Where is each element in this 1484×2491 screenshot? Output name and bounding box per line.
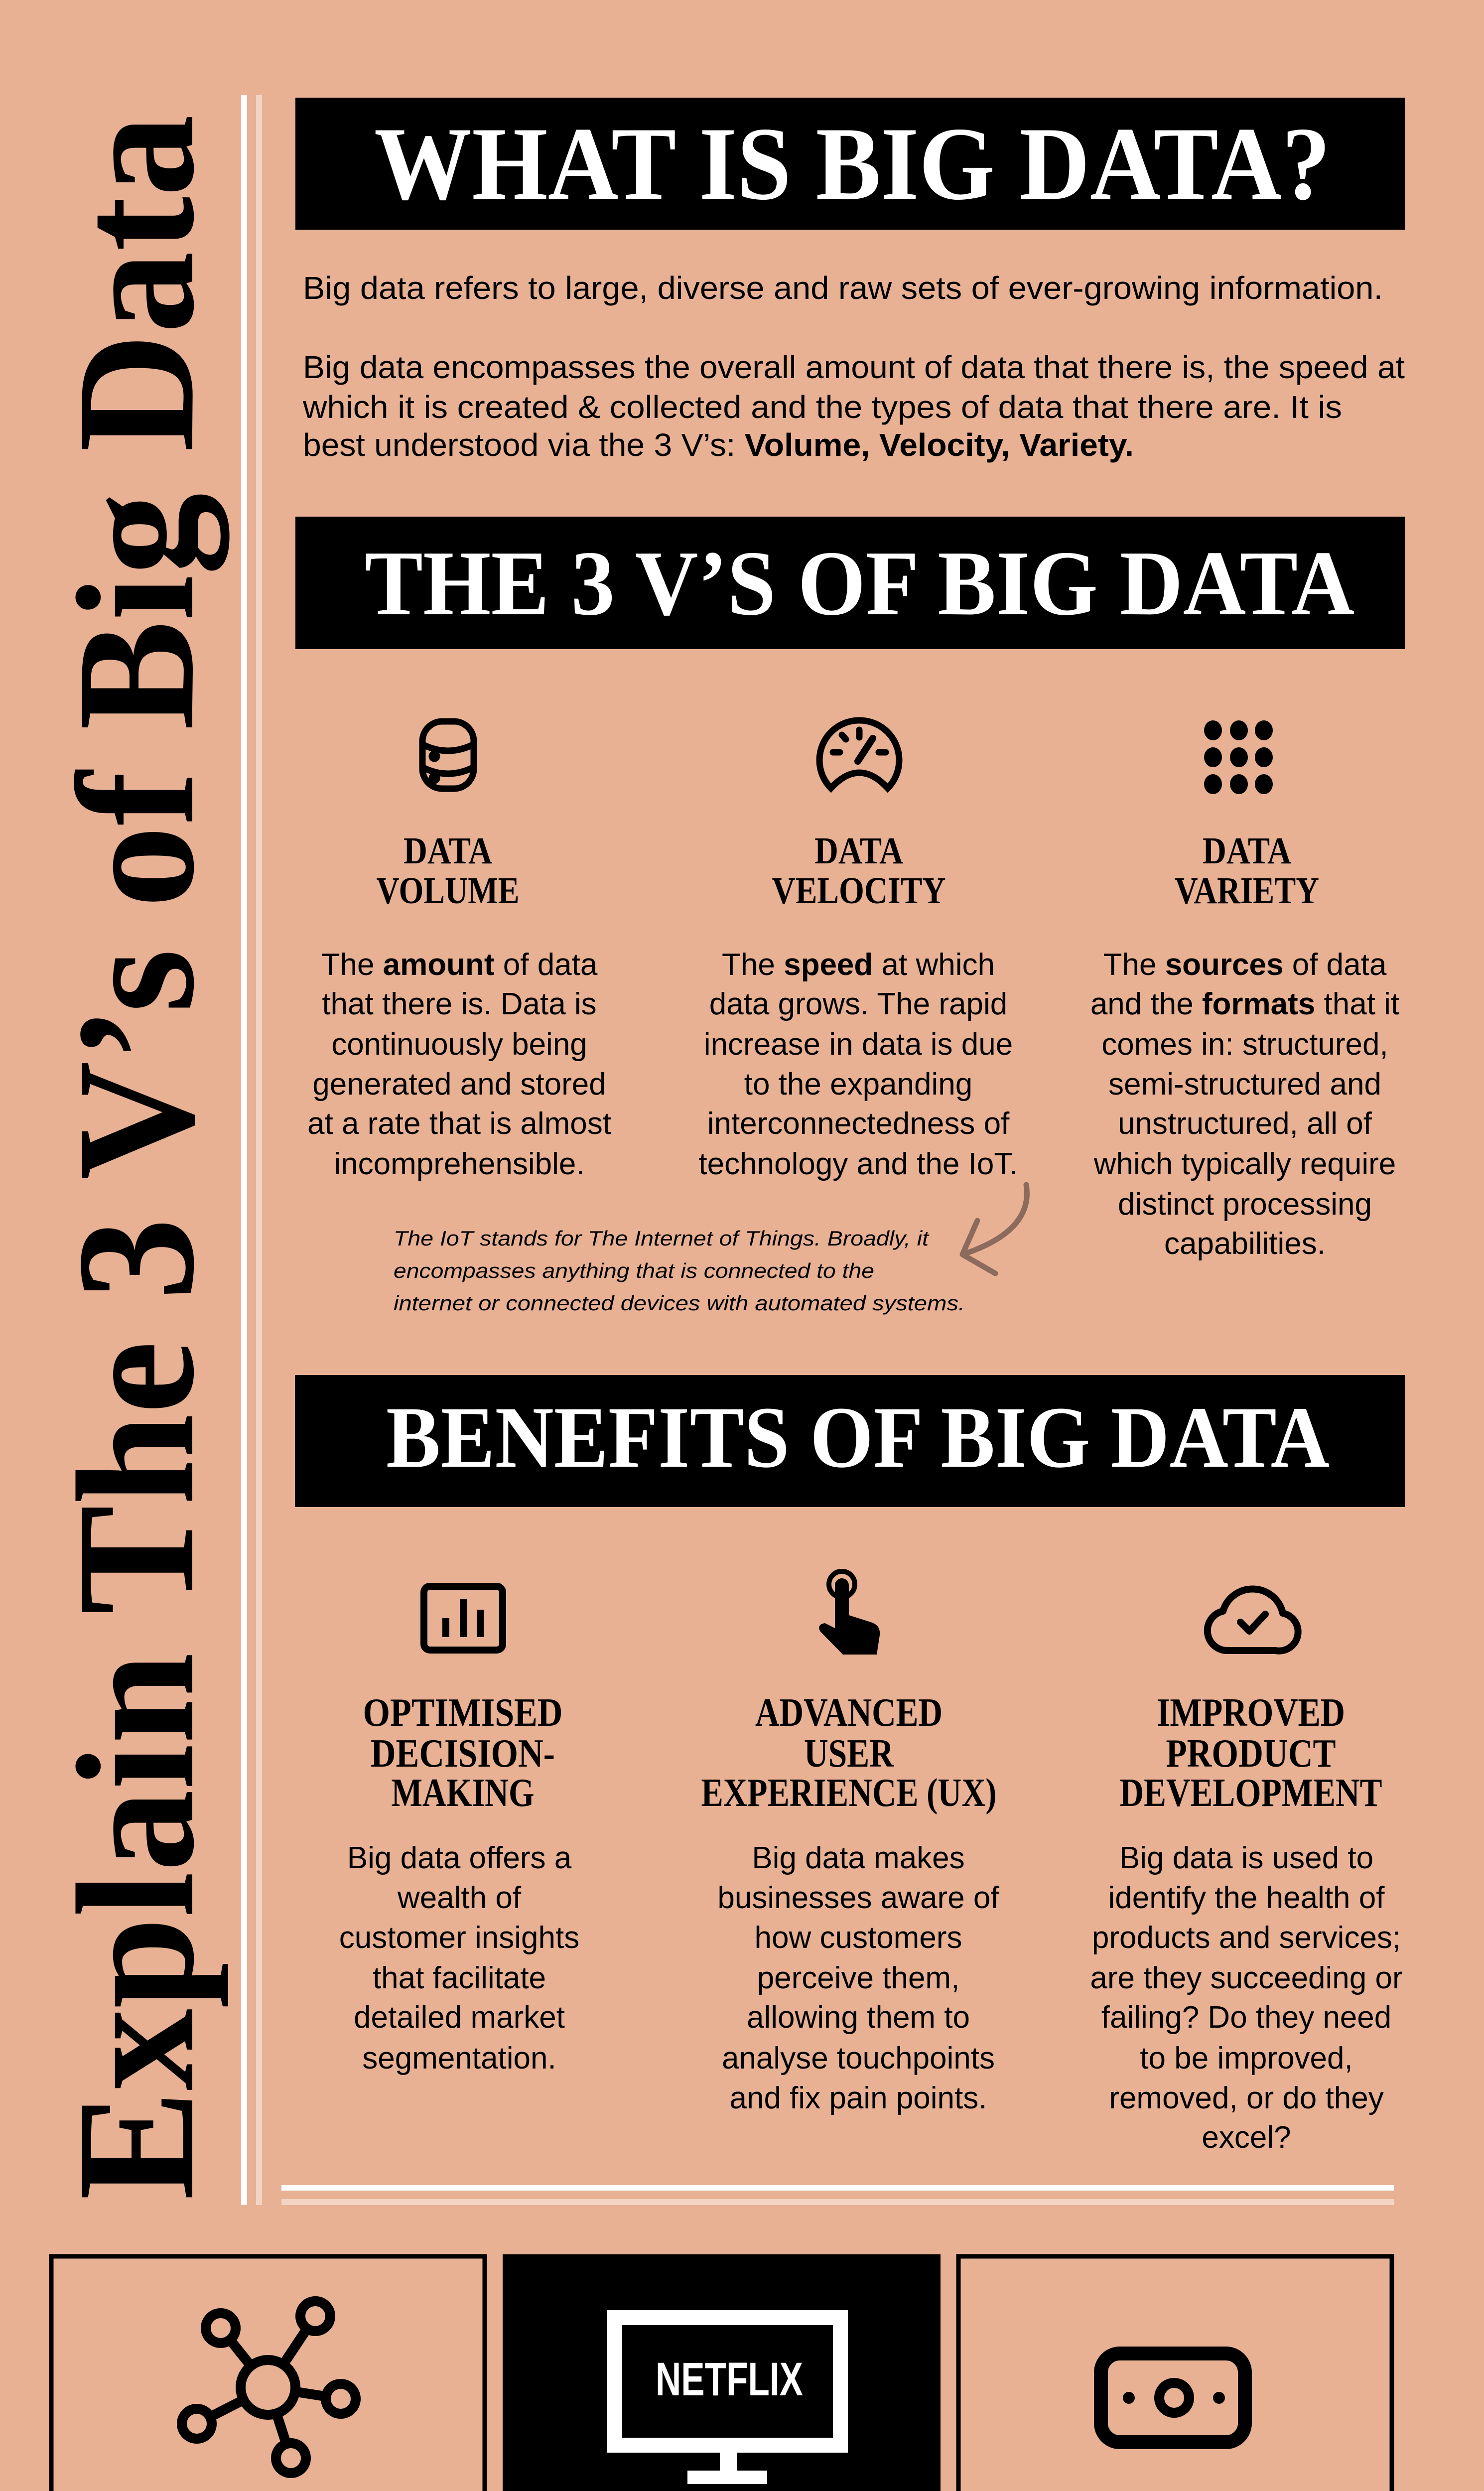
panel: data volume: The amount of data — [321, 948, 598, 982]
panel: improved product development: products and services; — [1092, 1921, 1401, 1955]
panel: data volume: DATA — [404, 830, 492, 872]
panel: data variety: comes in: structured, — [1101, 1027, 1388, 1062]
heading: what is big data: WHAT IS BIG DATA? — [374, 106, 1331, 222]
panel: data variety: The sources of data — [1103, 948, 1387, 982]
panel: improved product development: Big data is used to — [1119, 1841, 1373, 1875]
panel: optimised decision-making — [339, 1586, 579, 2076]
callout: IoT note: The IoT stands for The Internet of Things. Broadly, it — [394, 1227, 930, 1250]
panel: data velocity: data grows. The rapid — [709, 987, 1007, 1021]
icon: monitor with Netflix — [615, 2318, 840, 2484]
panel: data variety: capabilities. — [1164, 1227, 1326, 1261]
panel: data volume: generated and stored — [312, 1067, 606, 1102]
callout: IoT note: encompasses anything that is connected to the — [394, 1259, 874, 1282]
panel: data velocity: technology and the IoT. — [698, 1147, 1018, 1181]
panel: data volume: incomprehensible. — [334, 1147, 585, 1181]
icon: gauge — [819, 720, 899, 788]
panel: optimised decision-making: segmentation. — [362, 2041, 556, 2076]
panel: Netflix stat — [503, 2254, 941, 2491]
panel: advanced user experience: allowing them to — [747, 2000, 970, 2035]
icon: bar chart — [424, 1586, 503, 1650]
heading: the 3 v's of big data: THE 3 V’S OF BIG DATA — [365, 532, 1354, 635]
panel: data velocity: DATA — [814, 830, 903, 872]
text block: big data definition: Big data refers to large, diverse and raw sets of ever-growing information. — [303, 270, 1383, 306]
icon: monitor with Netflix: NETFLIX — [656, 2353, 803, 2406]
panel: improved product development: removed, or do they — [1109, 2081, 1384, 2115]
panel: improved product development: to be improved, — [1140, 2041, 1353, 2076]
panel: data variety: VARIETY — [1175, 870, 1319, 912]
panel: improved product development: IMPROVED — [1157, 1691, 1345, 1735]
icon: network — [182, 2301, 356, 2473]
text block: big data definition: best understood via the 3 V’s: Volume, Velocity, Variety. — [303, 427, 1134, 463]
panel: optimised decision-making: customer insights — [339, 1921, 579, 1955]
panel: advanced user experience: ADVANCED — [755, 1691, 943, 1735]
panel: optimised decision-making: wealth of — [397, 1881, 522, 1915]
panel: improved product development: excel? — [1202, 2120, 1291, 2155]
panel: data volume — [307, 721, 611, 1181]
panel: optimised decision-making: OPTIMISED — [363, 1691, 563, 1735]
panel: data velocity — [698, 720, 1018, 1181]
panel: data velocity: increase in data is due — [704, 1027, 1013, 1062]
panel: data quality stat — [958, 2256, 1392, 2491]
panel: data variety: unstructured, all of — [1118, 1107, 1372, 1141]
panel: data volume: at a rate that is almost — [307, 1107, 611, 1141]
panel: data volume: continuously being — [331, 1027, 587, 1062]
panel: optimised decision-making: Big data offers a — [347, 1841, 572, 1875]
panel: advanced user experience: USER — [804, 1732, 894, 1776]
panel: optimised decision-making: DECISION- — [371, 1732, 555, 1776]
panel: advanced user experience: EXPERIENCE (UX) — [701, 1771, 996, 1815]
icon: pointing hand — [819, 1571, 880, 1655]
panel: data variety — [1090, 720, 1399, 1261]
panel: improved product development: identify the health of — [1108, 1881, 1385, 1915]
panel: improved product development: failing? Do they need — [1101, 2000, 1391, 2035]
panel: data volume: VOLUME — [377, 870, 519, 912]
vertical title: Explain The 3 V’s of Big Data — [43, 115, 232, 2200]
panel: data variety: and the formats that it — [1090, 987, 1399, 1021]
panel: data variety: DATA — [1203, 830, 1291, 872]
icon: database — [422, 721, 474, 789]
panel: data volume: that there is. Data is — [322, 987, 597, 1021]
panel: data velocity: The speed at which — [722, 948, 995, 982]
panel: advanced user experience: analyse touchpoints — [722, 2041, 995, 2076]
panel: advanced user experience: how customers — [755, 1921, 962, 1955]
panel: optimised decision-making: that facilitate — [373, 1961, 546, 1995]
text block: big data definition: Big data encompasses the overall amount of data that there is, the speed at — [303, 349, 1405, 385]
panel: IoT devices stat — [51, 2256, 485, 2491]
text block: big data definition: which it is created & collected and the types of data that there are. It is — [302, 389, 1342, 425]
panel: advanced user experience — [701, 1571, 999, 2115]
panel: data velocity: VELOCITY — [772, 870, 945, 912]
text block: big data definition — [302, 270, 1405, 463]
panel: optimised decision-making: MAKING — [392, 1771, 534, 1815]
icon: dot grid — [1204, 720, 1273, 794]
panel: advanced user experience: perceive them, — [757, 1961, 959, 1995]
panel: advanced user experience: Big data makes — [752, 1841, 965, 1875]
icon: cloud check — [1208, 1589, 1298, 1651]
panel: data variety: distinct processing — [1118, 1187, 1372, 1222]
heading: benefits of big data: BENEFITS OF BIG DATA — [386, 1389, 1330, 1486]
panel: data velocity: to the expanding — [744, 1067, 972, 1102]
callout: IoT note: internet or connected devices with automated systems. — [394, 1291, 965, 1315]
heading: benefits of big data — [295, 1375, 1405, 1507]
icon: money — [1101, 2353, 1245, 2442]
panel: data variety: semi-structured and — [1108, 1067, 1381, 1102]
panel: advanced user experience: businesses aware of — [717, 1881, 999, 1915]
panel: improved product development: are they succeeding or — [1090, 1961, 1403, 1995]
panel: improved product development: PRODUCT — [1166, 1732, 1336, 1776]
panel: data variety: which typically require — [1093, 1147, 1396, 1181]
panel: improved product development: DEVELOPMENT — [1120, 1771, 1382, 1815]
callout: IoT note — [394, 1227, 965, 1315]
arrow: curved pointer to note — [962, 1185, 1027, 1273]
panel: data velocity: interconnectedness of — [707, 1107, 1010, 1141]
panel: advanced user experience: and fix pain points. — [729, 2081, 987, 2115]
panel: optimised decision-making: detailed market — [354, 2000, 565, 2035]
panel: improved product development — [1090, 1589, 1403, 2155]
